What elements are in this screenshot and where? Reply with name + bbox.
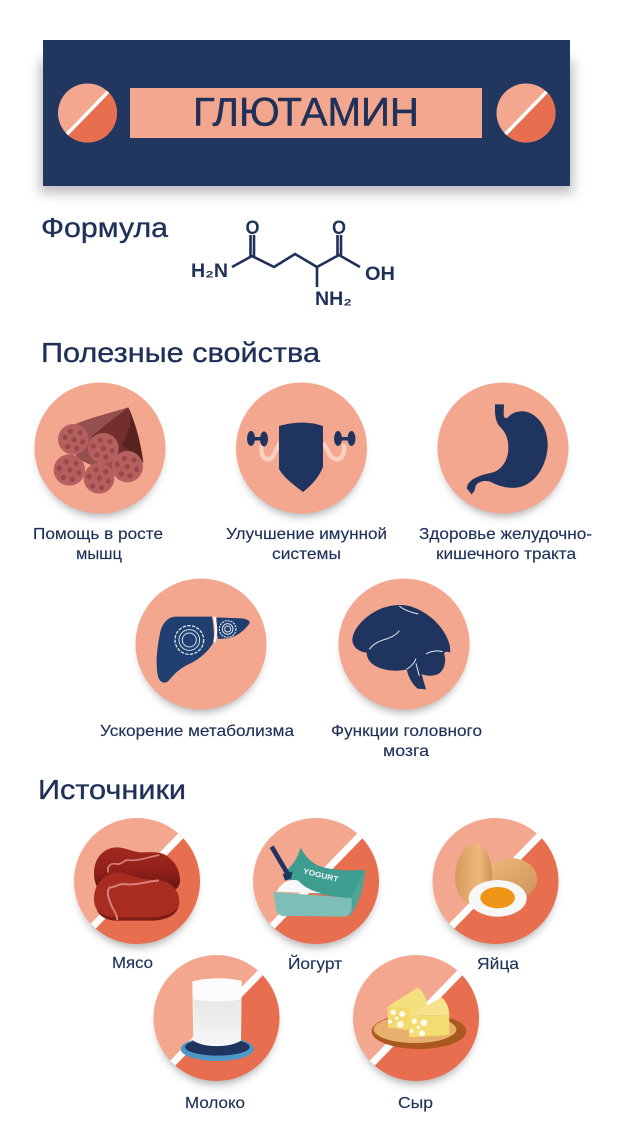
panel: cheese [350, 950, 482, 1086]
icon: shield [279, 423, 323, 492]
label: brain function: Функции головного [331, 723, 482, 740]
icon: right pill [496, 84, 556, 142]
title bar [130, 88, 482, 138]
chemical formula: OH [365, 264, 395, 285]
label: brain function [331, 723, 482, 760]
icon: yogurt: YOGURT [302, 867, 340, 884]
icon: cheese [372, 987, 466, 1049]
panel: yogurt [250, 813, 382, 949]
panel: eggs [430, 813, 562, 949]
label: immunity: системы [272, 546, 341, 563]
header banner [40, 40, 573, 193]
icon: left pill [58, 84, 117, 142]
label: metabolism: Ускорение метаболизма [100, 723, 294, 740]
panel: muscle growth [34, 382, 166, 516]
chemical formula: O [246, 218, 260, 239]
icon: meat [94, 847, 180, 921]
icon: right dumbbell [334, 431, 356, 446]
chemical formula: O [332, 218, 346, 239]
panel: immunity [38, 382, 592, 1112]
label: yogurt: Йогурт [288, 954, 343, 973]
label: brain function: мозга [383, 743, 429, 760]
icon: arms [261, 443, 344, 459]
heading: sources: Источники [38, 774, 186, 805]
label: immunity [226, 526, 387, 563]
panel: milk [150, 950, 282, 1086]
label: immunity: Улучшение имунной [226, 526, 387, 543]
chemical formula: H₂N [191, 261, 228, 282]
label: milk: Молоко [185, 1095, 245, 1112]
label: digestive health: кишечного тракта [436, 546, 576, 563]
icon: milk glass [181, 978, 254, 1061]
icon: eggs [455, 843, 537, 917]
icon: left dumbbell [247, 431, 268, 446]
label: digestive health: Здоровье желудочно- [419, 526, 592, 543]
title bar: ГЛЮТАМИН [193, 90, 419, 134]
label: digestive health [419, 526, 592, 563]
panel: meat [71, 813, 203, 949]
panel: metabolism [136, 578, 266, 712]
heading: formula: Формула [41, 212, 168, 243]
icon: stomach [467, 404, 548, 494]
chemical formula: NH₂ [315, 289, 352, 310]
label: meat: Мясо [112, 955, 153, 972]
label: muscle growth: мышц [76, 546, 122, 563]
chemical formula [191, 218, 395, 310]
heading: useful properties: Полезные свойства [41, 337, 320, 368]
icon: liver [157, 617, 250, 683]
label: muscle growth [33, 526, 163, 563]
label: eggs: Яйца [477, 956, 519, 973]
panel: brain function [338, 578, 470, 712]
panel: digestive health [438, 382, 568, 516]
icon: muscle [54, 407, 143, 494]
icon: brain [352, 605, 450, 689]
label: muscle growth: Помощь в росте [33, 526, 163, 543]
label: cheese: Сыр [398, 1095, 433, 1112]
